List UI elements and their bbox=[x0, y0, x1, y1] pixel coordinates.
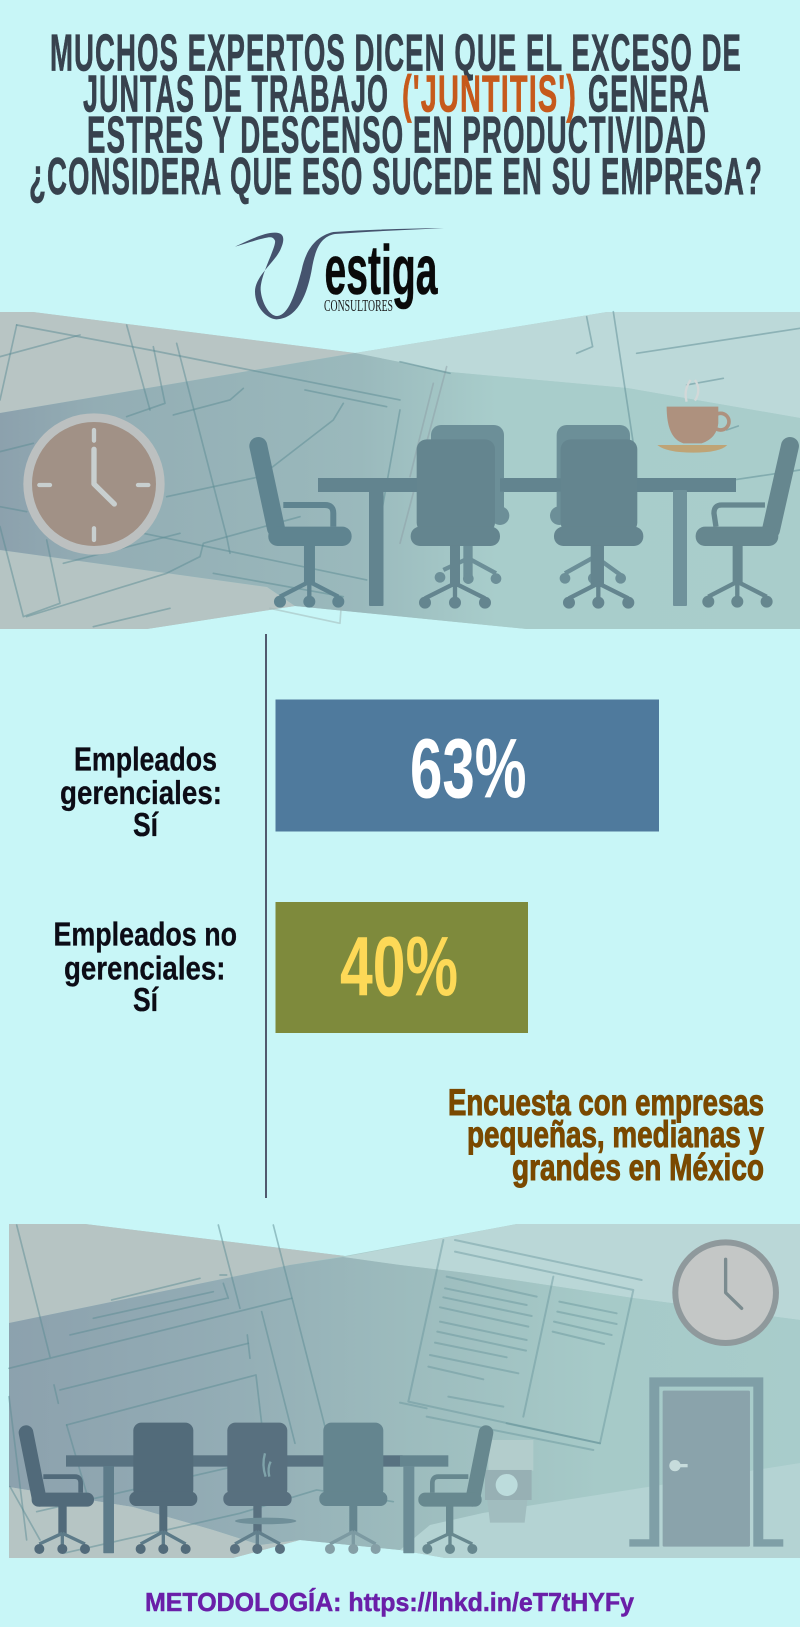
bar: Empleados no gerenciales 40% bbox=[276, 902, 528, 1033]
label: Empleados no gerenciales: Sí bbox=[133, 981, 159, 1018]
bar chart bbox=[54, 700, 659, 1033]
text block: survey note bbox=[448, 1082, 764, 1188]
title: ('JUNTITIS') bbox=[402, 66, 577, 124]
label: Empleados gerenciales: Empleados bbox=[74, 740, 217, 778]
panel: bottom office illustration bbox=[9, 1224, 800, 1558]
panel: top meeting room illustration bbox=[0, 312, 800, 629]
bar: Empleados gerenciales 63%: 63% bbox=[410, 722, 526, 816]
icon: table and chairs bbox=[26, 1423, 403, 1554]
room background bbox=[9, 1224, 800, 1558]
icon: meeting table and chairs bbox=[258, 425, 790, 609]
label: Empleados no gerenciales: gerenciales: bbox=[64, 950, 226, 986]
room background bbox=[0, 312, 800, 629]
footer: methodology link: METODOLOGÍA: https://lnkd.in/eT7tHYFy bbox=[145, 1587, 635, 1617]
label: Empleados no gerenciales bbox=[54, 916, 237, 1018]
icon: door bbox=[629, 1377, 783, 1547]
label: Empleados gerenciales: Sí bbox=[133, 806, 159, 843]
front chairs and right chair bbox=[411, 439, 643, 609]
logo: Vestiga Consultores bbox=[235, 228, 444, 319]
bar: Empleados no gerenciales 40%: 40% bbox=[340, 920, 458, 1014]
label: Empleados gerenciales: gerenciales: bbox=[60, 774, 222, 811]
icon: wall clock bbox=[23, 413, 165, 555]
table bbox=[318, 478, 736, 606]
vertical axis line bbox=[265, 634, 267, 1198]
icon: coffee cup bbox=[657, 380, 729, 453]
bar: Empleados gerenciales 63% bbox=[276, 700, 659, 832]
icon: wall clock bbox=[672, 1239, 779, 1346]
label: Empleados no gerenciales: Empleados no bbox=[54, 916, 237, 952]
icon: takeaway coffee cup bbox=[485, 1440, 533, 1523]
label: Empleados gerenciales bbox=[60, 740, 222, 843]
logo: Vestiga Consultores: estiga bbox=[324, 231, 438, 309]
title bbox=[29, 24, 763, 206]
table shown over back chairs bbox=[500, 478, 563, 492]
left chair bbox=[258, 446, 276, 528]
title: JUNTAS DE TRABAJO bbox=[83, 66, 389, 124]
logo: Vestiga Consultores: CONSULTORES bbox=[324, 296, 393, 315]
back chairs bbox=[431, 425, 630, 584]
